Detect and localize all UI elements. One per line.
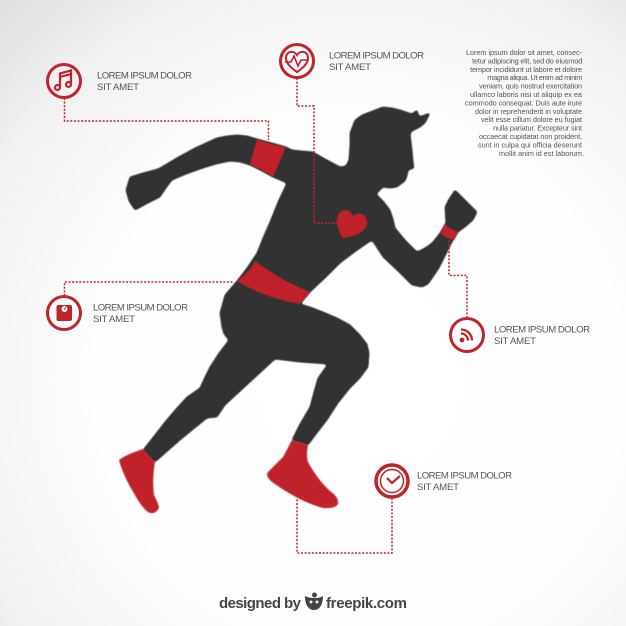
connector: clock to shoe xyxy=(297,498,392,553)
icon: clock xyxy=(376,465,408,497)
waist band xyxy=(237,261,310,304)
paragraph: velit esse cillum dolore eu fugiat xyxy=(481,115,582,124)
back shoe xyxy=(119,449,159,513)
paragraph: ullamco laboris nisi ut aliquip ex ea xyxy=(470,90,583,99)
icon: scale xyxy=(48,296,80,330)
label: wifi: SIT AMET xyxy=(494,336,536,347)
connector: wifi to wrist xyxy=(449,240,467,318)
icon: music xyxy=(48,64,80,98)
paragraph: occaecat cupidatat non proident, xyxy=(479,132,582,141)
runner silhouette xyxy=(119,107,477,513)
pulse item xyxy=(280,44,424,78)
paragraph: magna aliqua. Ut enim ad minim xyxy=(487,73,582,82)
paragraph: dolor in reprehenderit in voluptate xyxy=(475,107,582,116)
wifi item xyxy=(450,318,590,352)
paragraph: tetur adipiscing elit, sed do eiusmod xyxy=(472,56,582,65)
connector: scale to waist xyxy=(64,282,233,296)
paragraph: veniam, quis nostrud exercitation xyxy=(479,82,582,91)
wrist band xyxy=(440,224,458,240)
label: clock: SIT AMET xyxy=(417,482,459,493)
heart xyxy=(337,210,367,238)
label: clock: LOREM IPSUM DOLOR xyxy=(417,470,512,482)
clock item xyxy=(376,465,512,497)
label: scale: LOREM IPSUM DOLOR xyxy=(93,302,188,314)
arm band xyxy=(250,139,286,177)
paragraph: Lorem ipsum dolor sit amet, consec- xyxy=(466,48,583,57)
label: music: SIT AMET xyxy=(97,82,139,93)
credit: freepik.com: freepik.com xyxy=(326,595,407,612)
paragraph: commodo consequat. Duis aute irure xyxy=(465,98,582,107)
music item xyxy=(48,64,192,98)
paragraph: tempor incididunt ut labore et dolore xyxy=(470,65,582,74)
connector lines xyxy=(64,78,467,553)
icon: freepik logo xyxy=(305,592,323,610)
scale item xyxy=(48,296,188,330)
label: pulse: LOREM IPSUM DOLOR xyxy=(329,50,424,62)
paragraph: sunt in culpa qui officia deserunt xyxy=(478,140,582,149)
connector: music to arm band xyxy=(64,98,268,140)
icon: heart pulse xyxy=(280,44,314,78)
label: wifi: LOREM IPSUM DOLOR xyxy=(494,324,590,336)
label: music: LOREM IPSUM DOLOR xyxy=(97,70,192,82)
connector: pulse to heart xyxy=(297,78,337,223)
paragraph: mollit anim id est laborum. xyxy=(499,149,584,158)
footer credit xyxy=(219,592,407,612)
icon: wifi xyxy=(450,318,484,352)
body xyxy=(126,107,477,462)
label: pulse: SIT AMET xyxy=(329,62,371,73)
label: scale: SIT AMET xyxy=(93,314,135,325)
credit: designed by: designed by xyxy=(219,595,302,612)
paragraph: nulla pariatur. Excepteur sint xyxy=(493,124,582,133)
front shoe xyxy=(267,440,338,508)
